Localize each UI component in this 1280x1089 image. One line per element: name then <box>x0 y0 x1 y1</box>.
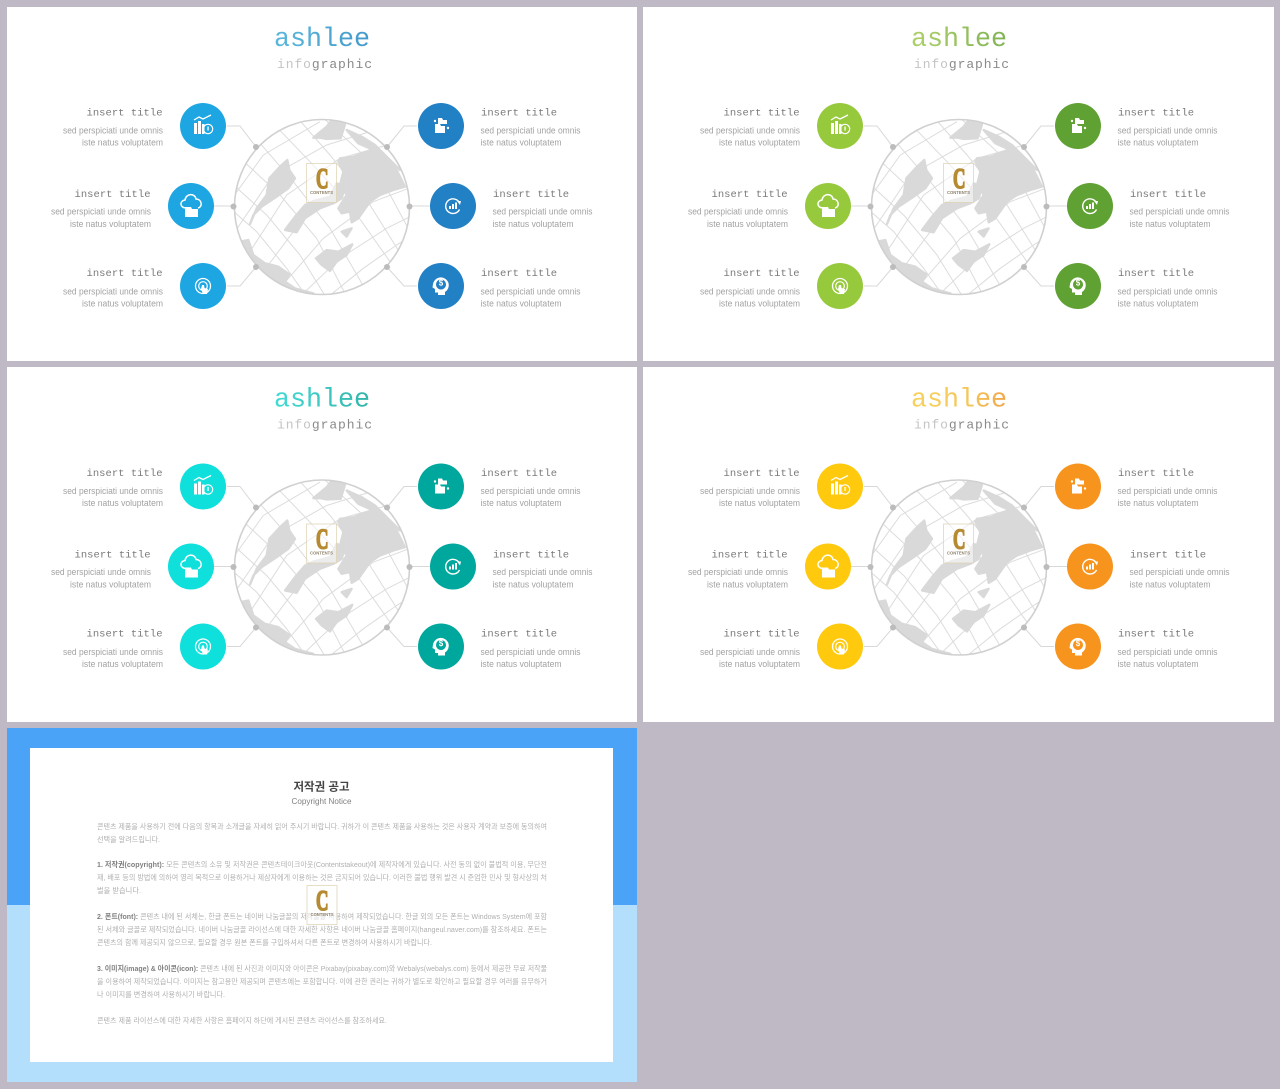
node: top right: sed perspiciati unde omnis <box>480 486 581 496</box>
node: top right: iste natus voluptatem <box>480 138 562 148</box>
globe with connectors <box>214 476 430 659</box>
node: top left: insert title <box>724 108 800 120</box>
node: top right: insert title <box>481 468 557 480</box>
node: middle left <box>688 544 851 590</box>
node: top right <box>418 464 581 510</box>
node: bottom left <box>63 624 226 670</box>
node: middle left: iste natus voluptatem <box>707 219 788 229</box>
node: middle right: insert title <box>493 550 569 562</box>
heading: copyright notice Korean: 저작권 공고 <box>293 780 350 794</box>
node: top left <box>700 464 863 510</box>
subtitle: infographic: infographic <box>914 57 1009 72</box>
watermark logo <box>307 885 337 924</box>
node: bottom right: insert title <box>1118 268 1194 280</box>
node: bottom left <box>700 624 863 670</box>
node: top right <box>1055 464 1218 510</box>
node: middle right: iste natus voluptatem <box>1130 580 1210 590</box>
node: bottom right: $ <box>1076 278 1081 288</box>
node: top right: insert title <box>481 108 557 120</box>
text block: introduction: 선택을 알려드립니다. <box>97 834 160 844</box>
node: bottom left <box>63 263 226 309</box>
node: top right <box>1055 103 1218 149</box>
text block: copyright clause <box>97 859 547 895</box>
node: bottom left: sed perspiciati unde omnis <box>700 286 801 296</box>
globe with connectors <box>851 476 1067 659</box>
node: top right: iste natus voluptatem <box>480 498 562 508</box>
node: bottom right: insert title <box>481 628 557 640</box>
node: middle left <box>51 544 214 590</box>
node: middle left: sed perspiciati unde omnis <box>51 206 152 216</box>
node: middle right: iste natus voluptatem <box>492 580 574 590</box>
node: bottom left: sed perspiciati unde omnis <box>63 647 164 657</box>
text block: image and icon clause <box>97 963 547 999</box>
watermark logo: CONTENTS <box>947 190 970 195</box>
node: top left: iste natus voluptatem <box>82 138 163 148</box>
watermark logo <box>306 163 336 202</box>
node: middle left: iste natus voluptatem <box>70 219 151 229</box>
node: middle left: insert title <box>712 189 788 201</box>
node: bottom right <box>418 263 581 309</box>
node: bottom right: insert title <box>1118 628 1194 640</box>
node: middle left: insert title <box>74 550 150 562</box>
panel: copyright notice <box>7 728 637 1082</box>
subtitle: infographic: infographic <box>277 57 372 72</box>
text block: image and icon clause: 을 이용하여 제작되었습니다. 이미지는 참고용만 제공되며 콘텐츠에는 포함합니다. 이에 관한 권리는 귀하가 별도로 확인하고 필요할 경우 여러를 유무하거 <box>97 976 547 986</box>
node: bottom left: insert title <box>86 628 162 640</box>
node: bottom right: insert title <box>481 268 557 280</box>
text block: introduction: 콘텐츠 제품을 사용하기 전에 다음의 항목과 소개글을 자세히 읽어 주시기 바랍니다. 귀하가 이 콘텐츠 제품을 사용하는 것은 사용자 계약과 보증에 동의하여 <box>97 821 547 831</box>
node: bottom right: $ <box>439 639 444 648</box>
watermark logo: C <box>953 524 966 556</box>
node: middle left <box>688 183 851 229</box>
node: top left <box>63 103 226 149</box>
node: middle right <box>1067 183 1230 229</box>
node: middle left: sed perspiciati unde omnis <box>688 567 789 577</box>
text block: introduction <box>97 821 547 844</box>
node: middle right: iste natus voluptatem <box>1130 219 1210 229</box>
watermark logo: C <box>316 163 328 195</box>
node: middle right <box>430 544 593 590</box>
watermark logo: C <box>316 885 328 917</box>
node: top left: insert title <box>86 468 162 480</box>
node: bottom left: insert title <box>724 628 800 640</box>
node: top left: iste natus voluptatem <box>82 498 163 508</box>
watermark logo: C <box>953 163 966 195</box>
watermark logo <box>944 524 974 563</box>
node: top right: sed perspiciati unde omnis <box>1118 126 1218 136</box>
node: top left <box>63 464 226 510</box>
node: top right: insert title <box>1118 468 1194 480</box>
panel: green infographic <box>643 7 1274 361</box>
node: bottom left: sed perspiciati unde omnis <box>700 647 801 657</box>
watermark logo: CONTENTS <box>947 550 970 556</box>
text block: font clause: 콘텐츠의 함께 제공되지 않으므로, 필요할 경우 원본 폰트를 구입하셔서 다른 폰트로 변경하여 사용하시기 바랍니다. <box>97 937 432 947</box>
subheading: copyright notice English: Copyright Notice <box>292 796 352 806</box>
node: top left <box>700 103 863 149</box>
text block: copyright clause: 재, 배포 등의 방법에 의하여 영리 목적으로 이용하거나 제삼자에게 이용하는 것은 금지되어 있습니다. 이러한 불법 행위 발견 시 준엄한 민사 및 형사상의 처 <box>97 872 547 882</box>
node: top left: insert title <box>86 108 162 120</box>
node: middle right <box>430 183 593 229</box>
node: bottom right <box>1055 624 1218 670</box>
node: bottom left: iste natus voluptatem <box>82 659 163 669</box>
node: top left: insert title <box>724 468 800 480</box>
watermark logo: CONTENTS <box>310 550 333 556</box>
globe with connectors <box>851 115 1067 298</box>
node: top right: iste natus voluptatem <box>1118 498 1198 508</box>
node: top left: iste natus voluptatem <box>719 498 800 508</box>
node: middle left: iste natus voluptatem <box>70 580 151 590</box>
watermark logo <box>306 524 336 563</box>
node: top right <box>418 103 581 149</box>
watermark logo <box>944 163 974 202</box>
panel: teal infographic <box>7 367 637 722</box>
node: middle left: iste natus voluptatem <box>707 580 788 590</box>
node: bottom right: sed perspiciati unde omnis <box>480 286 581 296</box>
node: top right: iste natus voluptatem <box>1118 138 1198 148</box>
node: bottom left: insert title <box>724 268 800 280</box>
panel: yellow infographic <box>643 367 1274 722</box>
node: middle right: sed perspiciati unde omnis <box>492 567 593 577</box>
node: top right: sed perspiciati unde omnis <box>480 126 581 136</box>
node: middle right: sed perspiciati unde omnis <box>1130 567 1230 577</box>
heading: ashlee: ashlee <box>274 386 370 416</box>
node: top right: insert title <box>1118 108 1194 120</box>
text block: copyright clause: 벌을 받습니다. <box>97 885 141 895</box>
heading: ashlee: ashlee <box>911 386 1007 416</box>
node: bottom right: sed perspiciati unde omnis <box>480 647 581 657</box>
node: middle right: sed perspiciati unde omnis <box>1130 206 1230 216</box>
globe with connectors <box>214 115 430 298</box>
heading: ashlee: ashlee <box>274 25 370 55</box>
node: bottom right: sed perspiciati unde omnis <box>1118 647 1218 657</box>
node: bottom left: sed perspiciati unde omnis <box>63 286 164 296</box>
node: bottom right <box>418 624 581 670</box>
node: bottom left: iste natus voluptatem <box>82 298 163 308</box>
subtitle: infographic: infographic <box>914 418 1009 432</box>
text block: image and icon clause: 나 이미지를 변경하여 사용하시기 바랍니다. <box>97 989 225 999</box>
text block: font clause: 2. 폰트(font): 콘텐츠 내에 된 서체는, 한글 폰트는 네이버 나눔글꼴의 저작물을 사용하여 제작되었습니다. 한글 외의 모든 폰트는 Windows System에 포함 <box>97 911 547 921</box>
node: bottom right: $ <box>439 278 444 288</box>
watermark logo: CONTENTS <box>310 190 333 195</box>
node: middle right: iste natus voluptatem <box>492 219 574 229</box>
text block: copyright clause: 1. 저작권(copyright): 모든 콘텐츠의 소유 및 저작권은 콘텐츠테이크아웃(Contentstakeout)에 제작자에게 있습니다. 사전 동의 없이 불법적 이용, 무단전 <box>97 859 547 869</box>
node: middle right: insert title <box>493 189 569 201</box>
text block: license note: 콘텐츠 제품 라이선스에 대한 자세한 사항은 홈페이지 하단에 게시된 콘텐츠 라이선스를 참조하세요. <box>97 1015 387 1025</box>
node: bottom left: insert title <box>86 268 162 280</box>
node: bottom left: iste natus voluptatem <box>719 659 800 669</box>
node: middle left <box>51 183 214 229</box>
watermark logo: CONTENTS <box>310 912 334 917</box>
node: top left: sed perspiciati unde omnis <box>700 486 801 496</box>
node: middle left: sed perspiciati unde omnis <box>51 567 152 577</box>
node: bottom right: iste natus voluptatem <box>1118 298 1198 308</box>
node: middle right: sed perspiciati unde omnis <box>492 206 593 216</box>
node: bottom right: iste natus voluptatem <box>480 659 562 669</box>
node: bottom left: iste natus voluptatem <box>719 298 800 308</box>
text block: font clause: 된 서체와 글꼴로 제작되었습니다. 네이버 나눔글꼴 라이선스에 대한 자세한 사항은 네이버 나눔글꼴 홈페이지(hangeul.naver.com)를 참조하세요. 폰트는 <box>97 924 547 934</box>
node: bottom right: iste natus voluptatem <box>480 298 562 308</box>
node: middle right: insert title <box>1130 550 1206 562</box>
node: middle right: insert title <box>1130 189 1206 201</box>
panel: blue infographic <box>7 7 637 361</box>
node: top left: sed perspiciati unde omnis <box>63 126 164 136</box>
node: top left: iste natus voluptatem <box>719 138 800 148</box>
node: middle right <box>1067 544 1230 590</box>
node: middle left: sed perspiciati unde omnis <box>688 206 789 216</box>
subtitle: infographic: infographic <box>277 418 372 432</box>
node: middle left: insert title <box>712 550 788 562</box>
heading: ashlee: ashlee <box>911 25 1007 55</box>
node: bottom right: sed perspiciati unde omnis <box>1118 286 1218 296</box>
node: bottom right: $ <box>1076 639 1081 648</box>
node: bottom right <box>1055 263 1218 309</box>
node: top left: sed perspiciati unde omnis <box>700 126 801 136</box>
node: bottom left <box>700 263 863 309</box>
node: top right: sed perspiciati unde omnis <box>1118 486 1218 496</box>
node: bottom right: iste natus voluptatem <box>1118 659 1198 669</box>
watermark logo: C <box>316 524 328 556</box>
text block: font clause <box>97 911 547 947</box>
node: top left: sed perspiciati unde omnis <box>63 486 164 496</box>
node: middle left: insert title <box>74 189 150 201</box>
text block: image and icon clause: 3. 이미지(image) & 아이콘(icon): 콘텐츠 내에 된 사진과 이미지와 아이콘은 Pixabay(pixabay.com)와 Webalys(webalys.com) 등에서 제공한 무료 저작물 <box>97 963 547 973</box>
